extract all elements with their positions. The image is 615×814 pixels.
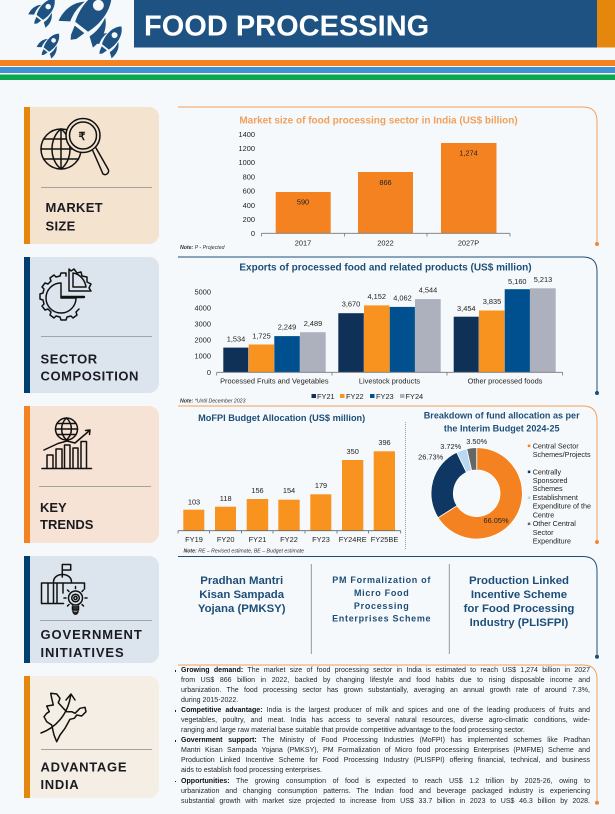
legend: FY23 — [376, 392, 394, 401]
panel: budget and breakdown: 66.05% — [483, 516, 509, 525]
grouped bar chart: 5,160 — [508, 277, 527, 286]
scheme: PMKSY: Yojana (PMKSY) — [198, 603, 286, 615]
card: market size — [24, 107, 159, 244]
bar chart: budget allocation: 179 — [315, 481, 327, 490]
scheme: PLISFPI: for Food Processing — [464, 603, 574, 615]
donut legend: Centre — [533, 510, 554, 519]
bar chart: budget allocation: FY19 — [185, 535, 203, 544]
scheme: PMFME: Enterprises Scheme — [332, 614, 431, 624]
grouped bar chart: Other processed foods — [468, 376, 543, 385]
heading: fund breakdown: the Interim Budget 2024-25 — [444, 424, 560, 434]
heading: MoFPI budget: MoFPI Budget Allocation (US$ million) — [198, 413, 365, 423]
bar chart: 1200 — [239, 144, 255, 153]
bar chart: budget allocation: FY20 — [217, 535, 235, 544]
bar chart: 2022 — [377, 238, 394, 248]
text block: advantages: Government support: The Ministry of Food Processing Industries (MoFPI) has implemented schemes like Pradhan — [181, 737, 590, 744]
icon: globe over bar chart — [42, 418, 92, 468]
bar chart: budget allocation: 396 — [378, 438, 391, 447]
note: Note: *Until December 2023 — [180, 398, 246, 404]
text block: advantages: ranging and large raw material base suitable that provide competitive advantage to the food processing sector. — [181, 727, 525, 734]
bar chart: budget allocation: 350 — [347, 447, 359, 456]
panel: advantage outline — [178, 665, 599, 805]
legend: FY21 — [317, 392, 335, 401]
heading: fund breakdown: Breakdown of fund allocation as per — [424, 410, 580, 420]
text block: advantages: during 2015-2022. — [181, 697, 238, 704]
bar chart: budget allocation: 156 — [251, 486, 264, 495]
text block: advantages: Competitive advantage: India is the largest producer of milk and spices and one of the leading producers of fruits and — [181, 707, 590, 714]
donut legend — [528, 441, 591, 545]
icon: building and bulb — [42, 564, 87, 614]
donut legend: Expenditure of the — [533, 502, 591, 511]
donut legend: Establishment — [533, 493, 578, 502]
donut legend: Sector — [533, 528, 554, 537]
card: key trends — [24, 406, 159, 543]
note: Note: RE – Revised estimate, BE – Budget estimate — [184, 549, 304, 555]
donut legend: Sponsored — [533, 476, 567, 485]
scheme: PMFME: PM Formalization of — [332, 575, 431, 585]
text block: advantages: urbanization. The food processing sector has grown substantially, averaging an annual growth rate of around 7.3%, — [181, 687, 590, 694]
bar chart: 1000 — [239, 158, 255, 167]
grouped bar chart: 4,062 — [393, 294, 412, 302]
title banner: FOOD PROCESSING — [144, 10, 429, 42]
header stripes — [0, 60, 615, 80]
title banner — [134, 0, 615, 48]
legend: FY24 — [406, 392, 423, 401]
grouped bar chart: 3,670 — [342, 300, 360, 308]
bar chart: budget allocation: FY23 — [312, 535, 330, 544]
donut legend: Schemes/Projects — [533, 450, 591, 459]
panel: exports chart — [178, 257, 599, 404]
legend: FY22 — [346, 392, 364, 401]
grouped bar chart: 5,213 — [534, 275, 552, 284]
grouped bar chart: 3000 — [195, 320, 211, 329]
heading: Exports of processed food and related products (US$ million) — [239, 263, 532, 274]
grouped bar chart: 2,489 — [304, 319, 322, 328]
bar chart — [239, 130, 510, 248]
text block: advantages: vegetables, poultry, and meat. India has access to several natural resources, diverse agro-climatic conditions, wide- — [181, 717, 590, 724]
card heading: GOVERNMENT — [40, 627, 143, 642]
donut legend: Central Sector — [533, 441, 579, 450]
panel: market size chart — [178, 107, 599, 251]
grouped bar chart: 1000 — [195, 352, 211, 361]
bar chart: budget allocation: FY21 — [249, 535, 266, 544]
bar chart: 400 — [243, 201, 255, 210]
bar chart: 200 — [243, 215, 255, 224]
card heading: SIZE — [46, 218, 76, 234]
text block: advantages: from US$ 866 billion in 2022, backed by changing lifestyle and food habits due to rising disposable income and — [181, 677, 590, 684]
bar chart: 1400 — [239, 130, 255, 139]
card heading: INITIATIVES — [40, 645, 125, 660]
grouped bar chart — [195, 275, 562, 401]
scheme: PLISFPI: Industry (PLISFPI) — [470, 617, 569, 629]
donut legend: Centrally — [533, 467, 561, 476]
bar chart: 1,274 — [459, 148, 478, 157]
icon: rockets — [26, 0, 131, 62]
grouped bar chart: 5000 — [195, 287, 211, 296]
text block: advantages: substantial growth with market size projected to increase from US$ 33.7 billion in 2023 to US$ 46.3 billion by 2028. — [181, 798, 590, 805]
panel: budget and breakdown — [178, 406, 599, 555]
card heading: ADVANTAGE — [40, 760, 127, 774]
bar chart: budget allocation: FY24RE — [339, 535, 367, 544]
card heading: TRENDS — [40, 517, 94, 532]
text block: advantages: Opportunities: The growing consumption of food is expected to reach US$ 1.2 trillion by 2025-26, owing to — [181, 778, 590, 785]
bar chart: budget allocation: FY25BE — [371, 535, 398, 544]
heading: Market size of food processing sector in India (US$ billion) — [239, 116, 518, 127]
panel: budget and breakdown: 26.73% — [418, 452, 444, 461]
bar chart: budget allocation: 118 — [220, 494, 232, 503]
bar chart: 2017 — [295, 238, 311, 248]
bar chart: budget allocation: 103 — [188, 498, 200, 506]
icon: india map and arrow — [41, 693, 86, 742]
grouped bar chart: Processed Fruits and Vegetables — [220, 376, 329, 385]
grouped bar chart: 4000 — [195, 304, 211, 312]
grouped bar chart: Livestock products — [359, 376, 420, 385]
bar chart: 800 — [243, 172, 255, 181]
card: sector composition — [24, 257, 159, 393]
text block: advantages: Production Linked Incentive Scheme for Food Processing Industry (PLISFPI) offering financial, technical, and business — [181, 757, 590, 764]
legend — [312, 392, 423, 401]
card heading: MARKET — [46, 200, 103, 215]
scheme: PLISFPI: Production Linked — [469, 575, 569, 587]
bar chart: budget allocation — [178, 438, 401, 544]
text block: advantages: urbanization and changing consumption patterns. The Indian food and beverage packaged industry is experiencing — [181, 788, 590, 795]
card heading: KEY — [40, 500, 67, 515]
grouped bar chart: 4,152 — [367, 292, 386, 301]
scheme: PMFME: Micro Food — [354, 588, 409, 598]
grouped bar chart: 2000 — [195, 336, 211, 345]
scheme: PMFME: Processing — [354, 601, 409, 611]
bar chart: 866 — [379, 178, 392, 187]
card heading: COMPOSITION — [40, 368, 139, 384]
panel: budget and breakdown: 3.50% — [466, 437, 488, 446]
grouped bar chart: 1,534 — [227, 335, 245, 344]
grouped bar chart: 2,249 — [278, 322, 296, 332]
grouped bar chart: 3,835 — [483, 297, 501, 306]
panel: budget and breakdown: 3.72% — [440, 442, 462, 451]
text block: advantages — [175, 666, 590, 805]
donut legend: Schemes — [533, 484, 563, 493]
donut chart — [431, 448, 522, 539]
scheme: PMKSY: Pradhan Mantri — [200, 575, 283, 587]
card heading: SECTOR — [40, 352, 98, 366]
donut legend: Other Central — [533, 519, 576, 528]
bar chart: 0 — [251, 229, 255, 238]
text block: advantages: Mantri Kisan Sampada Yojana (PMKSY), PM Formalization of Micro food processing Enterprises (PMFME) Scheme and — [181, 747, 590, 754]
card: government initiatives — [24, 556, 159, 663]
panel: government schemes — [178, 556, 599, 659]
grouped bar chart: 0 — [207, 368, 211, 377]
text block: advantages: aids to establish food processing enterprises. — [181, 767, 322, 774]
donut legend: Expenditure — [533, 536, 571, 545]
bar chart: 600 — [243, 187, 255, 196]
icon: gears with pie — [40, 269, 91, 320]
grouped bar chart: 4,544 — [419, 286, 437, 294]
scheme: PLISFPI: Incentive Scheme — [471, 589, 567, 601]
grouped bar chart: 1,725 — [252, 332, 271, 340]
grouped bar chart: 3,454 — [457, 304, 476, 313]
bar chart: budget allocation: FY22 — [280, 535, 298, 544]
scheme: PMKSY: Kisan Sampada — [199, 589, 285, 601]
bar chart: 590 — [297, 198, 309, 207]
note: Note: P - Projected — [180, 245, 226, 251]
text block: advantages: Growing demand: The market size of food processing sector in India is estimated to reach US$ 1,274 billion in 2027 — [181, 667, 590, 674]
icon: globe and magnifier: ₹ — [78, 131, 86, 143]
bar chart: budget allocation: 154 — [283, 486, 295, 495]
card: advantage india — [24, 676, 159, 798]
card heading: INDIA — [40, 777, 79, 792]
bar chart: 2027P — [458, 238, 479, 248]
